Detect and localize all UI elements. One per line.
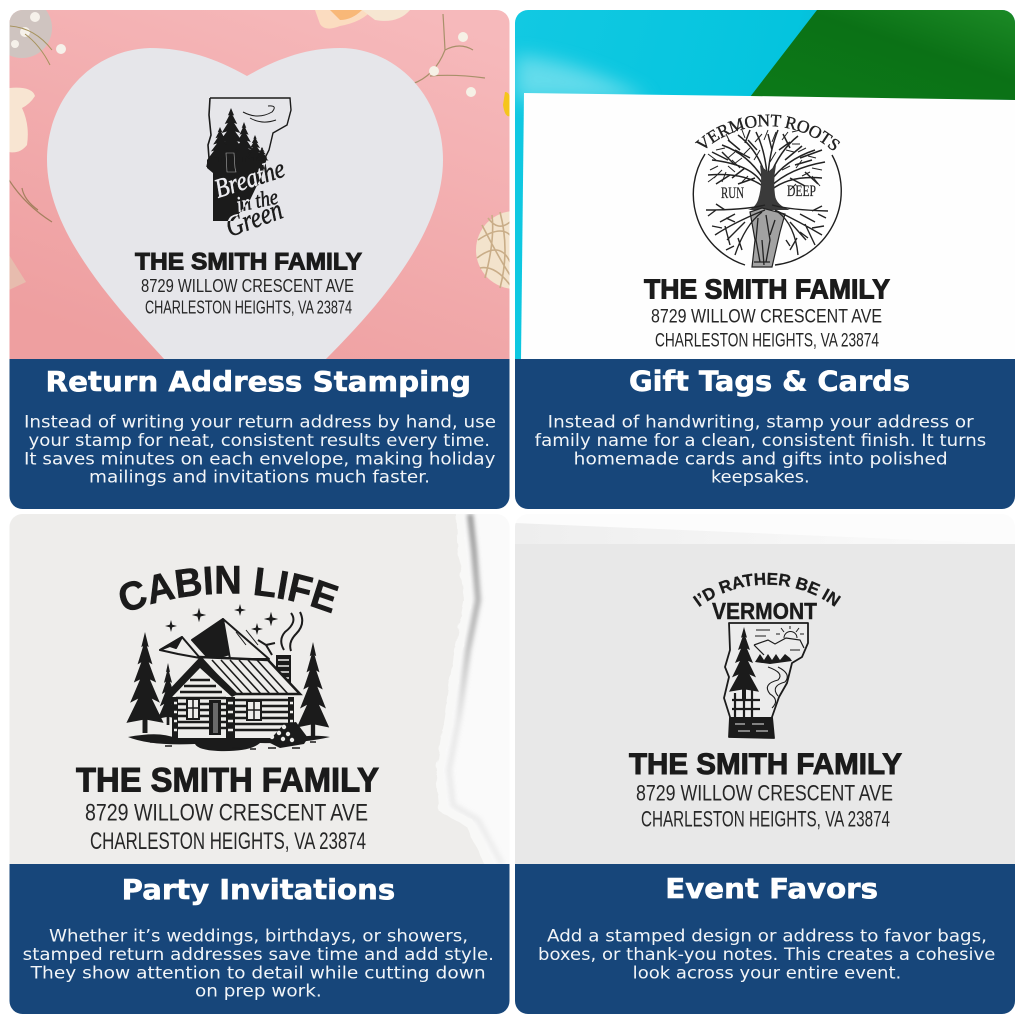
panel: party invitations [10,514,510,1014]
script text light: in the [234,184,280,217]
pine trees [126,632,329,737]
body text: Whether it’s weddings, birthdays, or showers, [49,927,468,947]
body text: stamped return addresses save time and add style. [23,945,494,965]
fence [732,690,760,718]
stamp address line 2: CHARLESTON HEIGHTS, VA 23874 [90,828,366,855]
pink photo background [9,10,510,360]
body text: They show attention to detail while cutting down [30,963,486,983]
body text: mailings and invitations much faster. [89,468,430,488]
tree crown [708,130,825,190]
body text: boxes, or thank-you notes. This creates a cohesive [538,945,995,965]
stars [165,604,278,635]
Vermont state outline [724,623,808,738]
heading: Party Invitations [122,873,395,906]
stamp: Vermont breathe in the green [207,98,291,244]
tree lower trunk [750,208,785,267]
tree roots [706,204,828,255]
stamp: Vermont Roots tree [692,114,842,268]
script text light [214,162,266,221]
white card [521,93,1015,360]
teal and green photo background [515,10,1015,360]
label: deep: DEEP [787,183,816,200]
tree trunk [748,165,790,210]
cabin [166,657,300,738]
body text: keepsakes. [711,468,810,488]
text: Vermont: VERMONT [712,598,818,624]
panel: return address stamping [10,10,510,509]
heading: Event Favors [665,872,878,905]
stamp address line 2: CHARLESTON HEIGHTS, VA 23874 [641,806,890,832]
caption band [515,864,1015,1015]
stamp family name: THE SMITH FAMILY [629,748,902,781]
mountains [160,619,275,660]
script text dark [228,163,285,236]
stamp family name: THE SMITH FAMILY [76,762,379,800]
chimney [276,655,291,684]
body text: Instead of writing your return address by hand, use [24,413,496,433]
script text light: Green [221,194,287,244]
stamp address line 1: 8729 WILLOW CRESCENT AVE [141,275,354,296]
body text [535,413,986,488]
body text [538,927,995,983]
torn paper background [0,505,510,870]
curved text: Cabin Life: CABIN LIFE [120,566,339,614]
heading: Gift Tags & Cards [629,364,910,398]
script text light: Breathe [211,153,288,204]
stamp address line 2: CHARLESTON HEIGHTS, VA 23874 [145,298,352,318]
body text [23,927,494,1002]
body text: homemade cards and gifts into polished [574,449,948,469]
stamp: I'd rather be in Vermont [692,572,841,739]
caption band [515,359,1015,510]
smoke [281,612,302,651]
river [767,667,787,708]
panel: event favors [515,523,1015,1014]
body text: Instead of handwriting, stamp your address or [548,413,974,433]
stamp family name: THE SMITH FAMILY [135,248,362,276]
body text: look across your entire event. [633,963,901,983]
tree crown fine twigs [708,126,822,190]
panel: gift tags and cards [515,10,1015,509]
heart card [47,48,443,360]
body text: Add a stamped design or address to favor bags, [547,927,987,947]
curved text: Vermont Roots: VERMONT ROOTS [694,114,840,150]
ground and log pile [128,722,330,751]
curved text: I'd rather be in: I’D RATHER BE IN [692,572,841,607]
script text dark: Green [221,194,287,244]
script text dark: Breathe [211,153,288,204]
caption band [9,359,510,510]
body text [24,413,496,488]
paper background [515,514,1015,865]
script text dark: in the [234,184,280,217]
sun and hills [776,626,804,638]
heading: Return Address Stamping [46,365,471,398]
body text: your stamp for neat, consistent results every time. [28,431,490,451]
caption band [9,864,510,1015]
ground fill [729,717,774,738]
decorative flowers and twigs [10,10,510,290]
stamp family name: THE SMITH FAMILY [644,274,890,304]
body text: It saves minutes on each envelope, making holiday [24,449,496,469]
stamp address line 1: 8729 WILLOW CRESCENT AVE [636,780,893,806]
body text: on prep work. [195,982,322,1002]
stamp address line 1: 8729 WILLOW CRESCENT AVE [85,800,368,826]
body text: family name for a clean, consistent finish. It turns [535,431,986,451]
stamp address line 1: 8729 WILLOW CRESCENT AVE [651,306,882,328]
pine tree [729,627,759,699]
label: run: RUN [721,185,744,202]
stamp: Cabin Life [120,566,339,752]
stamp address line 2: CHARLESTON HEIGHTS, VA 23874 [655,330,879,352]
